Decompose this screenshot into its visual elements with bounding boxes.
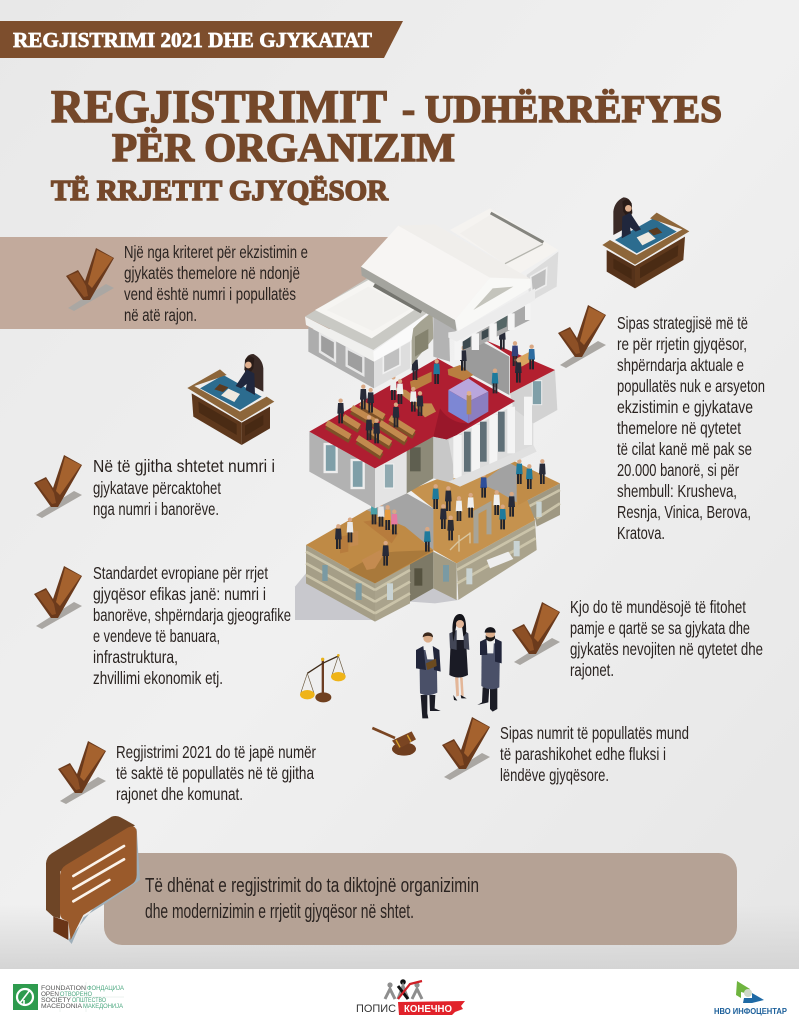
people, ground floor xyxy=(335,459,546,566)
text: number of courts xyxy=(93,456,275,519)
check 1 xyxy=(66,248,114,311)
panel: conclusion: Të dhënat e regjistrimit do ta diktojnë organizimin xyxy=(145,875,479,897)
check 7 xyxy=(58,741,106,804)
stone walls xyxy=(306,545,375,622)
text: european standards: e vendeve të banuara, xyxy=(93,626,220,646)
lawyer centre xyxy=(449,614,469,701)
text: strategy: themelore në qytetet xyxy=(617,418,741,438)
header ribbon: REGJISTRIMI 2021 DHE GJYKATAT xyxy=(13,28,372,52)
text: census 2021: Regjistrimi 2021 do të japë numër xyxy=(116,742,316,762)
text: number of courts: gjykatave përcaktohet xyxy=(93,478,221,498)
text: first criterion: Një nga kriteret për ekzistimin e xyxy=(124,242,308,262)
logo: Foundation Open Society Macedonia: FOUNDATION xyxy=(41,986,86,992)
icon: three lawyers xyxy=(300,614,502,756)
column row xyxy=(462,305,530,348)
icon: judge at desk, top right xyxy=(602,197,689,288)
text: european standards: zhvillimi ekonomik etj. xyxy=(93,668,223,688)
text: case flow xyxy=(500,723,689,785)
courtroom tables xyxy=(410,372,432,392)
text: clear picture: rajonet. xyxy=(570,660,614,680)
text: number of courts: Në të gjitha shtetet numri i xyxy=(93,456,275,476)
text: european standards: gjyqësor efikas janë: numri i xyxy=(93,584,266,604)
text: strategy: re për rrjetin gjyqësor, xyxy=(617,334,747,354)
upper storey and roof xyxy=(305,208,558,388)
glass witness box xyxy=(448,378,488,402)
floors xyxy=(306,493,433,583)
icon: speech bubble xyxy=(46,816,140,944)
text: strategy: të cilat kanë më pak se xyxy=(617,439,752,459)
left wing walls xyxy=(308,327,374,388)
logo: NVO Infocentar: НВО ИНФОЦЕНТАР xyxy=(714,1007,788,1016)
logo: Foundation Open Society Macedonia xyxy=(13,982,124,1012)
text: census 2021: të saktë të popullatës në të gjitha xyxy=(116,763,314,783)
icon: judge at desk, left xyxy=(187,354,274,445)
logo: Popis Konechno xyxy=(356,979,465,1015)
check 2 xyxy=(558,305,606,368)
icon: scales of justice xyxy=(300,654,346,702)
icon: gavel xyxy=(372,728,416,756)
title: - UDHËRRËFYES xyxy=(402,88,722,131)
logo: Foundation Open Society Macedonia: ФОНДАЦИЈА xyxy=(87,986,124,992)
left wing roof xyxy=(305,277,432,350)
courtroom level xyxy=(309,325,557,508)
text: first criterion xyxy=(124,242,308,325)
text: first criterion: gjykatës themelore në ndonjë xyxy=(124,263,300,283)
courtroom furniture xyxy=(363,520,398,543)
people, courtroom xyxy=(337,325,535,443)
text: strategy: shembull: Krusheva, xyxy=(617,481,737,501)
title: PËR ORGANIZIM xyxy=(112,125,455,170)
text: european standards xyxy=(93,563,291,688)
text: european standards: banorëve, shpërndarja gjeografike xyxy=(93,605,291,625)
logo: Foundation Open Society Macedonia: МАКЕДОНИЈА xyxy=(83,1004,123,1010)
back partition and side room xyxy=(463,341,509,395)
check 3 xyxy=(34,455,82,518)
walls below floor xyxy=(309,432,375,508)
text: census 2021: rajonet dhe komunat. xyxy=(116,784,243,804)
back wing xyxy=(527,252,558,302)
text: european standards: infrastruktura, xyxy=(93,647,178,667)
text: strategy: 20.000 banorë, si për xyxy=(617,460,739,480)
lawyer right xyxy=(477,627,502,712)
text: case flow: lëndëve gjyqësore. xyxy=(500,765,609,785)
title xyxy=(51,81,722,207)
text: case flow: Sipas numrit të popullatës mund xyxy=(500,723,689,743)
logo: Foundation Open Society Macedonia: MACEDONIA xyxy=(41,1004,82,1010)
text: european standards: Standardet evropiane për rrjet xyxy=(93,563,268,583)
text: census 2021 xyxy=(116,742,316,804)
text: clear picture: Kjo do të mundësojë të fitohet xyxy=(570,597,746,617)
text: number of courts: nga numri i banorëve. xyxy=(93,499,219,519)
building illustration xyxy=(295,208,560,622)
check 5 xyxy=(512,602,560,665)
check 4 xyxy=(34,566,82,629)
text: strategy: ekzistimin e gjykatave xyxy=(617,397,753,417)
panel: conclusion xyxy=(104,853,737,945)
text: strategy xyxy=(617,313,765,543)
text: strategy: Sipas strategjisë më të xyxy=(617,313,748,333)
logo: Popis Konechno: ПОПИС xyxy=(356,1003,396,1015)
ground floor xyxy=(295,459,560,622)
logo: Foundation Open Society Macedonia: OPEN xyxy=(41,992,59,998)
text: strategy: Resnja, Vinica, Berova, xyxy=(617,502,751,522)
text: clear picture xyxy=(570,597,763,680)
footer band xyxy=(0,969,799,1024)
entablature xyxy=(448,288,535,342)
header ribbon xyxy=(0,21,403,58)
logo: NVO Infocentar xyxy=(714,981,788,1016)
metal detector xyxy=(476,505,489,543)
red floor xyxy=(309,358,515,468)
logo: Popis Konechno: КОНЕЧНО xyxy=(404,1004,452,1015)
lawyer left xyxy=(416,632,441,718)
benches xyxy=(327,403,414,457)
text: first criterion: vend është numri i popullatës xyxy=(124,284,296,304)
text: case flow: të parashikohet edhe fluksi i xyxy=(500,744,666,764)
title: TË RRJETIT GJYQËSOR xyxy=(51,175,389,207)
central pitched roof xyxy=(361,267,457,331)
title: REGJISTRIMIT xyxy=(51,81,387,133)
logo: Foundation Open Society Macedonia: ОПШТЕСТВО xyxy=(72,998,106,1004)
panel: conclusion: dhe modernizimin e rrjetit gjyqësor në shtet. xyxy=(145,901,414,923)
check 6 xyxy=(442,717,490,780)
text: first criterion: në atë rajon. xyxy=(124,305,197,325)
panel: first criterion band xyxy=(0,237,388,329)
logo: Foundation Open Society Macedonia: ОТВОРЕНО xyxy=(60,992,92,998)
logo: Foundation Open Society Macedonia: SOCIETY xyxy=(41,998,71,1004)
text: strategy: Kratova. xyxy=(617,523,665,543)
text: strategy: shpërndarja aktuale e xyxy=(617,355,744,375)
